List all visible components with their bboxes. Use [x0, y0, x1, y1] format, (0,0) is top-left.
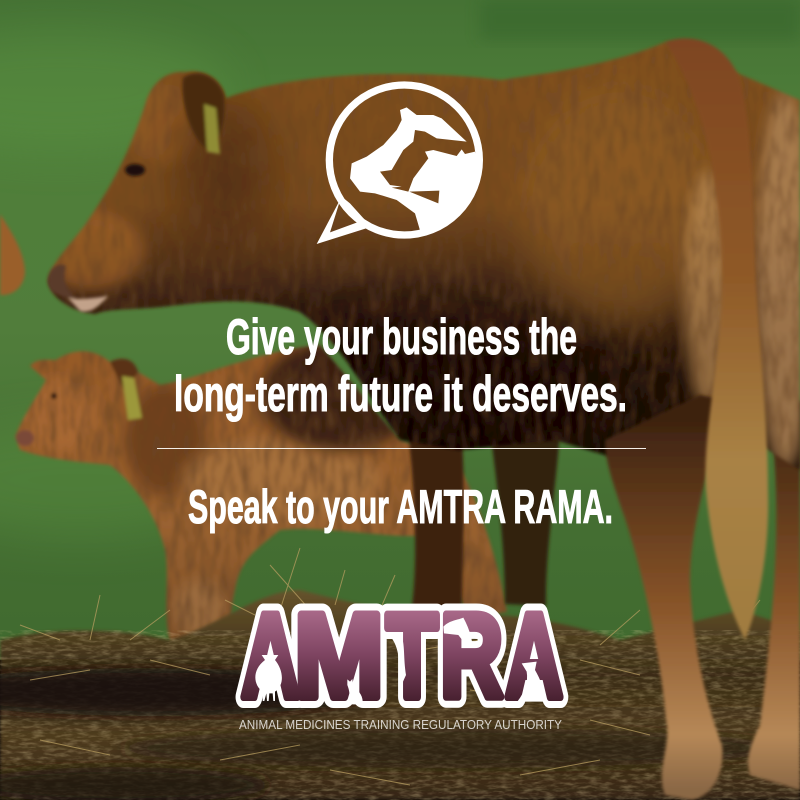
AMTRA logo: [241, 588, 563, 724]
logo letters: A: [505, 589, 563, 723]
logo outline: T: [386, 590, 438, 724]
logo outline: A: [505, 589, 563, 723]
near rear leg: [605, 395, 725, 800]
animal silhouettes: [350, 107, 477, 233]
logo outline: [241, 588, 563, 724]
logo letters: R: [440, 590, 503, 723]
far foreleg: [408, 430, 464, 612]
headline line 1: Give your business the: [226, 309, 577, 365]
bubble ring: [329, 85, 479, 235]
near foreleg: [490, 430, 560, 606]
logo outline: R: [440, 590, 503, 723]
head details: [48, 73, 224, 312]
bubble tail: [317, 197, 372, 244]
speech bubble icon with animal silhouettes: [317, 85, 479, 244]
ground and straw: [0, 548, 800, 800]
left cow muzzle: [0, 214, 25, 295]
logo tagline: ANIMAL MEDICINES TRAINING REGULATORY AUTHORITY: [239, 717, 562, 732]
horse head: [443, 618, 472, 647]
tail: [665, 38, 768, 640]
body: [46, 41, 800, 470]
far rear leg: [748, 400, 800, 790]
logo outline: M: [294, 590, 384, 723]
logo animal silhouettes: [255, 618, 547, 704]
logo letters: M: [294, 590, 384, 723]
cat: [347, 679, 363, 704]
divider: [157, 448, 646, 449]
logo letters: [241, 588, 563, 724]
headline: [174, 309, 627, 422]
horse tail: [388, 634, 406, 682]
logo letters: T: [386, 590, 438, 724]
sheep: [255, 655, 282, 701]
logo outline: A: [241, 588, 300, 723]
calf: [0, 340, 520, 650]
logo letters: A: [241, 588, 300, 723]
dog: [517, 662, 547, 702]
